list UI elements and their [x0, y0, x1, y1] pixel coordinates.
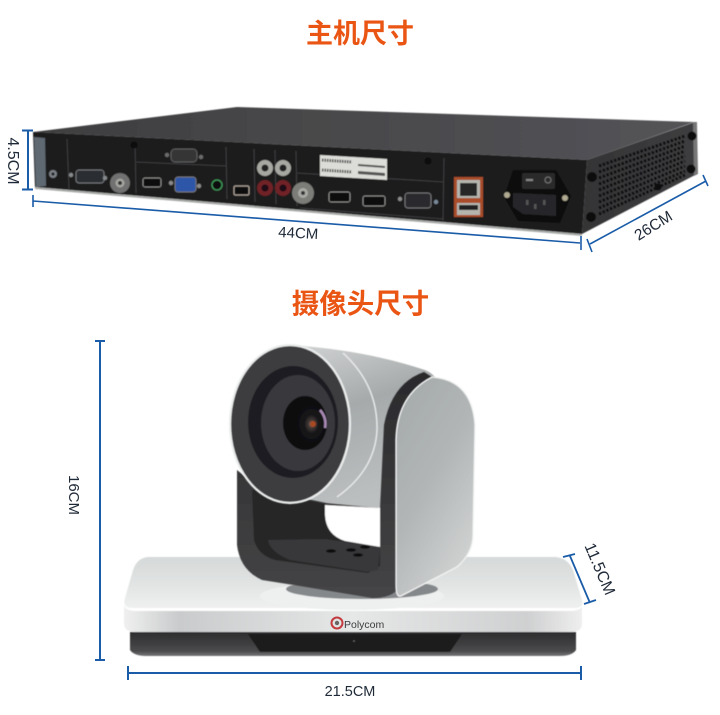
- camera logo: Polycom: [344, 619, 385, 631]
- title: host unit dimensions: 主机尺寸: [306, 19, 414, 49]
- camera logo: [332, 618, 385, 631]
- audio jack: [212, 180, 222, 190]
- DVI port: [69, 170, 107, 183]
- power socket module: [504, 170, 571, 223]
- host rear panel: [33, 132, 587, 236]
- dimension: 21.5CM width: [128, 666, 581, 700]
- BNC port 2: [292, 182, 314, 204]
- camera device photo: [124, 345, 582, 656]
- host top face: [33, 107, 694, 160]
- title: camera dimensions: 摄像头尺寸: [292, 288, 429, 319]
- HDMI port: [143, 178, 161, 187]
- dimension: 26CM depth: 26CM: [632, 208, 676, 244]
- dimension: 11.5CM depth: 11.5CM: [581, 541, 618, 598]
- HDMI port 3: [363, 196, 385, 206]
- camera side arm panel: [396, 377, 475, 596]
- VGA port: [169, 177, 201, 192]
- camera lens: [230, 345, 350, 503]
- dimension: 16CM height: [65, 341, 105, 660]
- host unit device photo: [33, 107, 698, 236]
- HDMI port 2: [329, 192, 350, 202]
- mini display port: [234, 186, 249, 195]
- dimension: 16CM height: 16CM: [65, 475, 82, 515]
- dimension: 4.5CM height: [4, 130, 33, 190]
- dimension: 4.5CM height: 4.5CM: [4, 137, 21, 185]
- dimension: 21.5CM width: 21.5CM: [325, 684, 375, 700]
- BNC port: [110, 173, 130, 193]
- host right side with vents: [582, 122, 698, 234]
- VGA port 2: [398, 193, 438, 208]
- serial port: [165, 149, 203, 162]
- dimension: 11.5CM depth: [563, 541, 618, 604]
- dimension: 26CM depth: [587, 175, 708, 252]
- dimension: 44CM width: 44CM: [278, 224, 319, 243]
- network ports: [454, 177, 483, 217]
- dimension: 44CM width: [33, 195, 581, 250]
- camera base: [124, 557, 582, 656]
- RCA connectors: [257, 160, 291, 196]
- round connector: [49, 170, 57, 178]
- camera stand arm: [237, 372, 432, 598]
- camera barrel: [290, 345, 437, 508]
- barcode label: [320, 155, 387, 180]
